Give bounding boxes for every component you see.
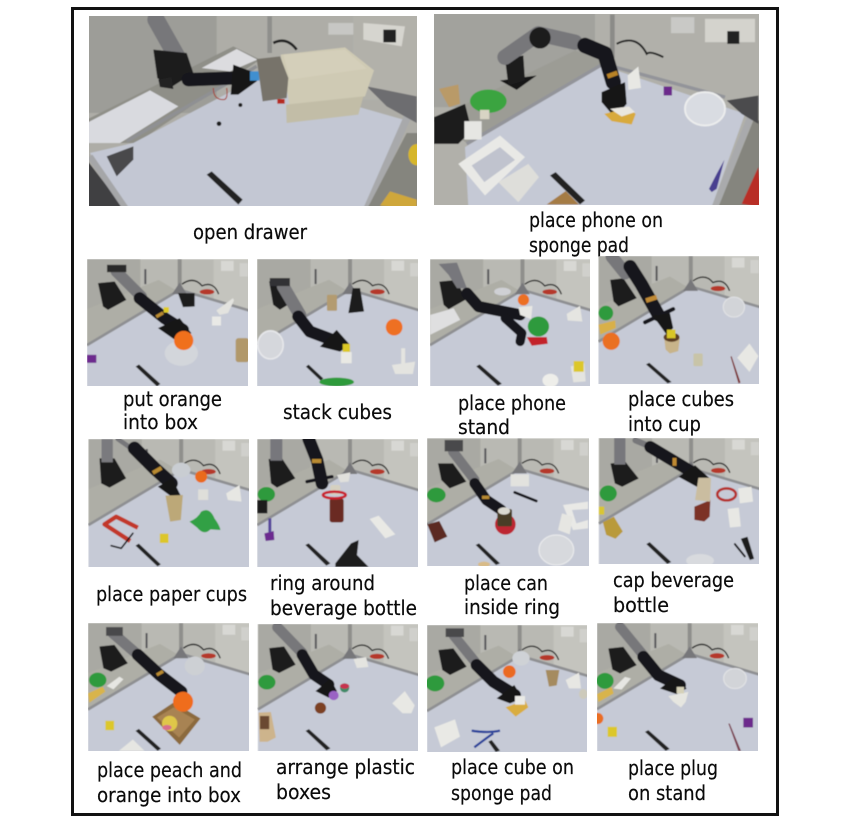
label: place phone on sponge pad: place phone on [529,208,663,232]
photo: arrange plastic boxes [257,624,418,751]
text: orange into box [97,783,241,807]
label: put orange into box: put orange [123,387,222,411]
icon: robot arm [643,657,680,685]
icon: robot arm [298,316,337,342]
photo: place peach and orange into box [88,623,249,751]
text: sponge pad [529,233,629,257]
icon: black stand and white box [434,104,489,144]
icon: white stand with plug [668,687,688,708]
icon: robot arm [477,665,515,695]
text: beverage bottle [270,596,417,620]
icon: robot arm [153,20,260,100]
text: into cup [628,412,701,436]
icon: orange fruit [503,665,516,678]
icon: orange fruit [386,319,403,336]
icon: drawer cabinet [257,47,374,123]
icon: white phone stand [628,66,641,90]
photo: put orange into box [87,259,248,386]
icon: robot arm [475,483,501,510]
icon: bottle with paper cup cap [694,478,711,522]
icon: black phone stand [335,540,369,567]
photo: place can inside ring [427,438,589,566]
text: sponge pad [451,781,552,805]
photo: cap beverage bottle [598,438,759,564]
icon: orange fruit [603,333,620,350]
icon: can inside red ring [495,507,516,535]
text: into box [123,410,198,434]
label: cap beverage bottle: cap beverage [613,568,734,592]
photo: place phone on sponge pad [434,14,759,205]
text: on stand [628,781,706,805]
icon: clear box [165,340,198,366]
label: place phone stand: place phone [458,391,566,415]
text: inside ring [464,595,560,619]
text: stand [458,415,510,439]
icon: sponge pad with cube [506,696,528,717]
icon: stacked paper cups [166,495,183,522]
photo: open drawer [89,16,417,206]
label: arrange plastic boxes: arrange plastic [276,755,415,779]
icon: robot arm [630,267,658,315]
icon: cardboard box with peach [152,702,200,745]
icon: white frame and holder [458,136,539,202]
icon: robot arm [500,27,627,114]
label: place cube on sponge pad: place cube on [451,755,574,779]
icon: orange fruit [173,692,193,712]
photo: place paper cups [88,439,249,567]
icon: robot arm [650,447,692,472]
label: stack cubes: stack cubes [283,400,392,424]
label: place paper cups: place paper cups [96,582,247,606]
icon: orange fruit [518,294,529,306]
label: place can inside ring: place can [464,571,548,595]
photo: place phone stand [430,259,590,386]
icon: purple cube [664,86,672,96]
label: open drawer: open drawer [193,220,308,244]
icon: cup with yellow cube [664,330,680,353]
icon: green frog toy [190,510,220,532]
label: place peach and orange into box: place peach and [97,758,242,782]
photo: place cubes into cup [598,256,759,384]
label: place plug on stand: place plug [628,756,718,780]
icon: beverage bottle with red ring [323,485,346,522]
icon: clear bowl [685,92,725,126]
text: boxes [276,780,331,804]
icon: paper cup [439,84,460,107]
photo: ring around beverage bottle [257,439,418,567]
icon: orange fruit [174,331,193,350]
photo: place cube on sponge pad [427,625,587,752]
icon: robot arm [309,439,322,483]
icon: plastic boxes [315,683,349,714]
icon: robot arm [134,448,171,483]
icon: robot arm [302,655,329,685]
label: place cubes into cup: place cubes [628,387,734,411]
photo: stack cubes [257,259,418,386]
photo: place plug on stand [597,623,758,751]
icon: orange fruit [195,471,207,483]
icon: stacked cubes [341,344,352,363]
icon: green frog [470,90,507,113]
icon: robot arm [467,293,520,315]
icon: red clamp [104,517,138,541]
icon: sponge pad with phone [604,106,636,124]
text: bottle [613,593,669,617]
label: ring around beverage bottle: ring around [270,571,375,595]
icon: can [603,517,623,539]
icon: green object on red stand [527,317,549,346]
icon: robot arm [140,298,183,330]
icon: robot arm [138,655,181,692]
